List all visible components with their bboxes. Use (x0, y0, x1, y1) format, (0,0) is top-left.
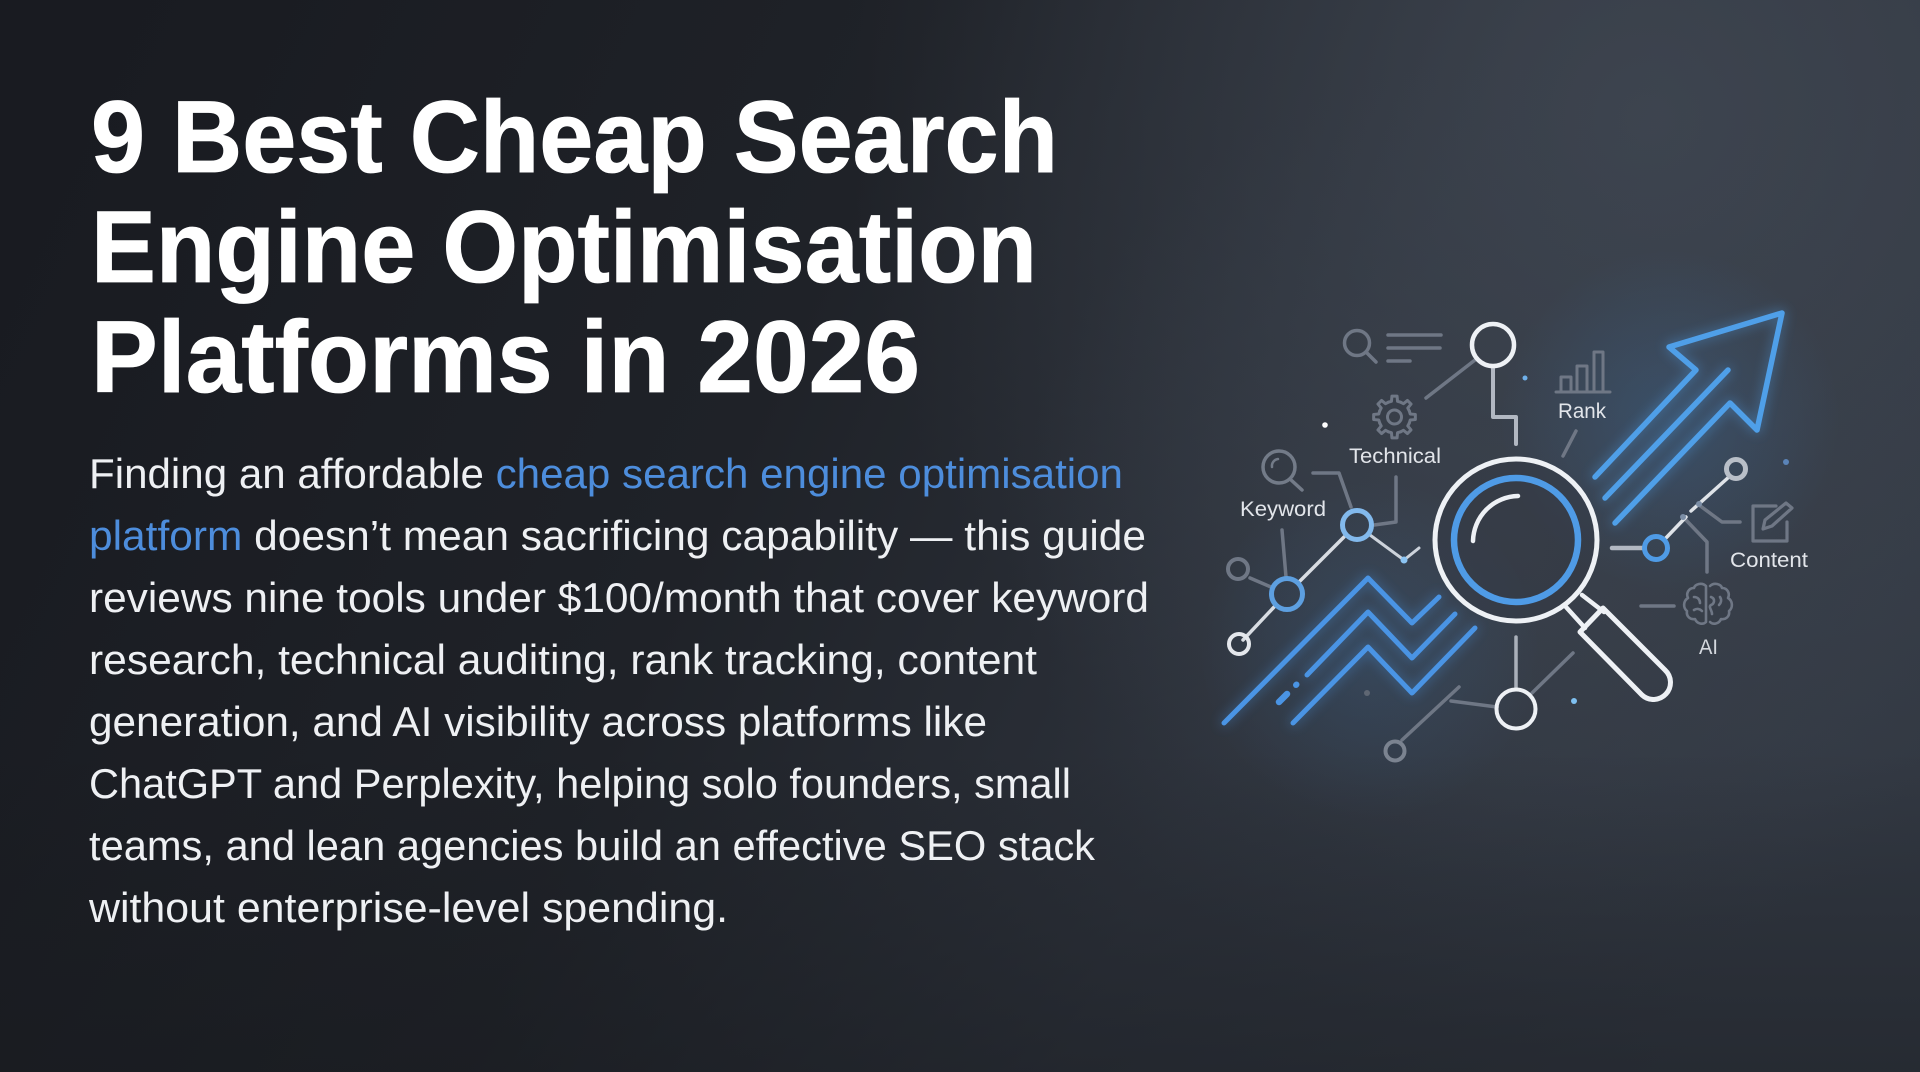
sparkle dots (1322, 376, 1789, 704)
body paragraph: ChatGPT and Perplexity, helping solo founders, small (89, 760, 1071, 807)
title: Platforms in 2026 (91, 300, 920, 414)
icon: search list (1344, 330, 1441, 362)
rising arrow (1595, 313, 1782, 523)
right data line with nodes (1612, 460, 1746, 560)
icon: AI brain (1684, 584, 1732, 624)
body paragraph: teams, and lean agencies build an effective SEO stack (89, 822, 1095, 869)
icon: keyword magnifier (1263, 451, 1302, 490)
body paragraph: research, technical auditing, rank tracking, content (89, 636, 1037, 683)
icon: gear (1374, 396, 1415, 438)
label: AI: AI (1699, 636, 1718, 659)
body paragraph: without enterprise-level spending. (88, 884, 728, 931)
title: Engine Optimisation (91, 190, 1037, 304)
icon: content pencil note (1753, 503, 1792, 541)
body paragraph (88, 450, 1149, 931)
network connectors (1250, 360, 1740, 740)
body paragraph: generation, and AI visibility across platforms like (89, 698, 987, 745)
top node with elbow line (1472, 324, 1516, 444)
bottom node (1386, 637, 1536, 760)
zigzag trend lines (1224, 578, 1475, 723)
label: Technical: Technical (1349, 445, 1441, 468)
label: Rank: Rank (1558, 400, 1606, 423)
label: Content: Content (1730, 549, 1808, 572)
label: Keyword: Keyword (1240, 498, 1326, 521)
magnifying glass (1435, 459, 1670, 699)
title (91, 80, 1058, 414)
SEO illustration (1190, 240, 1860, 830)
icon: rank bars (1556, 352, 1610, 392)
soft blue glows (1190, 240, 1860, 830)
left data line with nodes (1228, 510, 1419, 654)
body paragraph: reviews nine tools under $100/month that cover keyword (89, 574, 1149, 621)
title: 9 Best Cheap Search (91, 80, 1058, 194)
body paragraph: platform doesn’t mean sacrificing capability — this guide (89, 512, 1146, 559)
body paragraph: Finding an affordable cheap search engine optimisation (89, 450, 1123, 497)
